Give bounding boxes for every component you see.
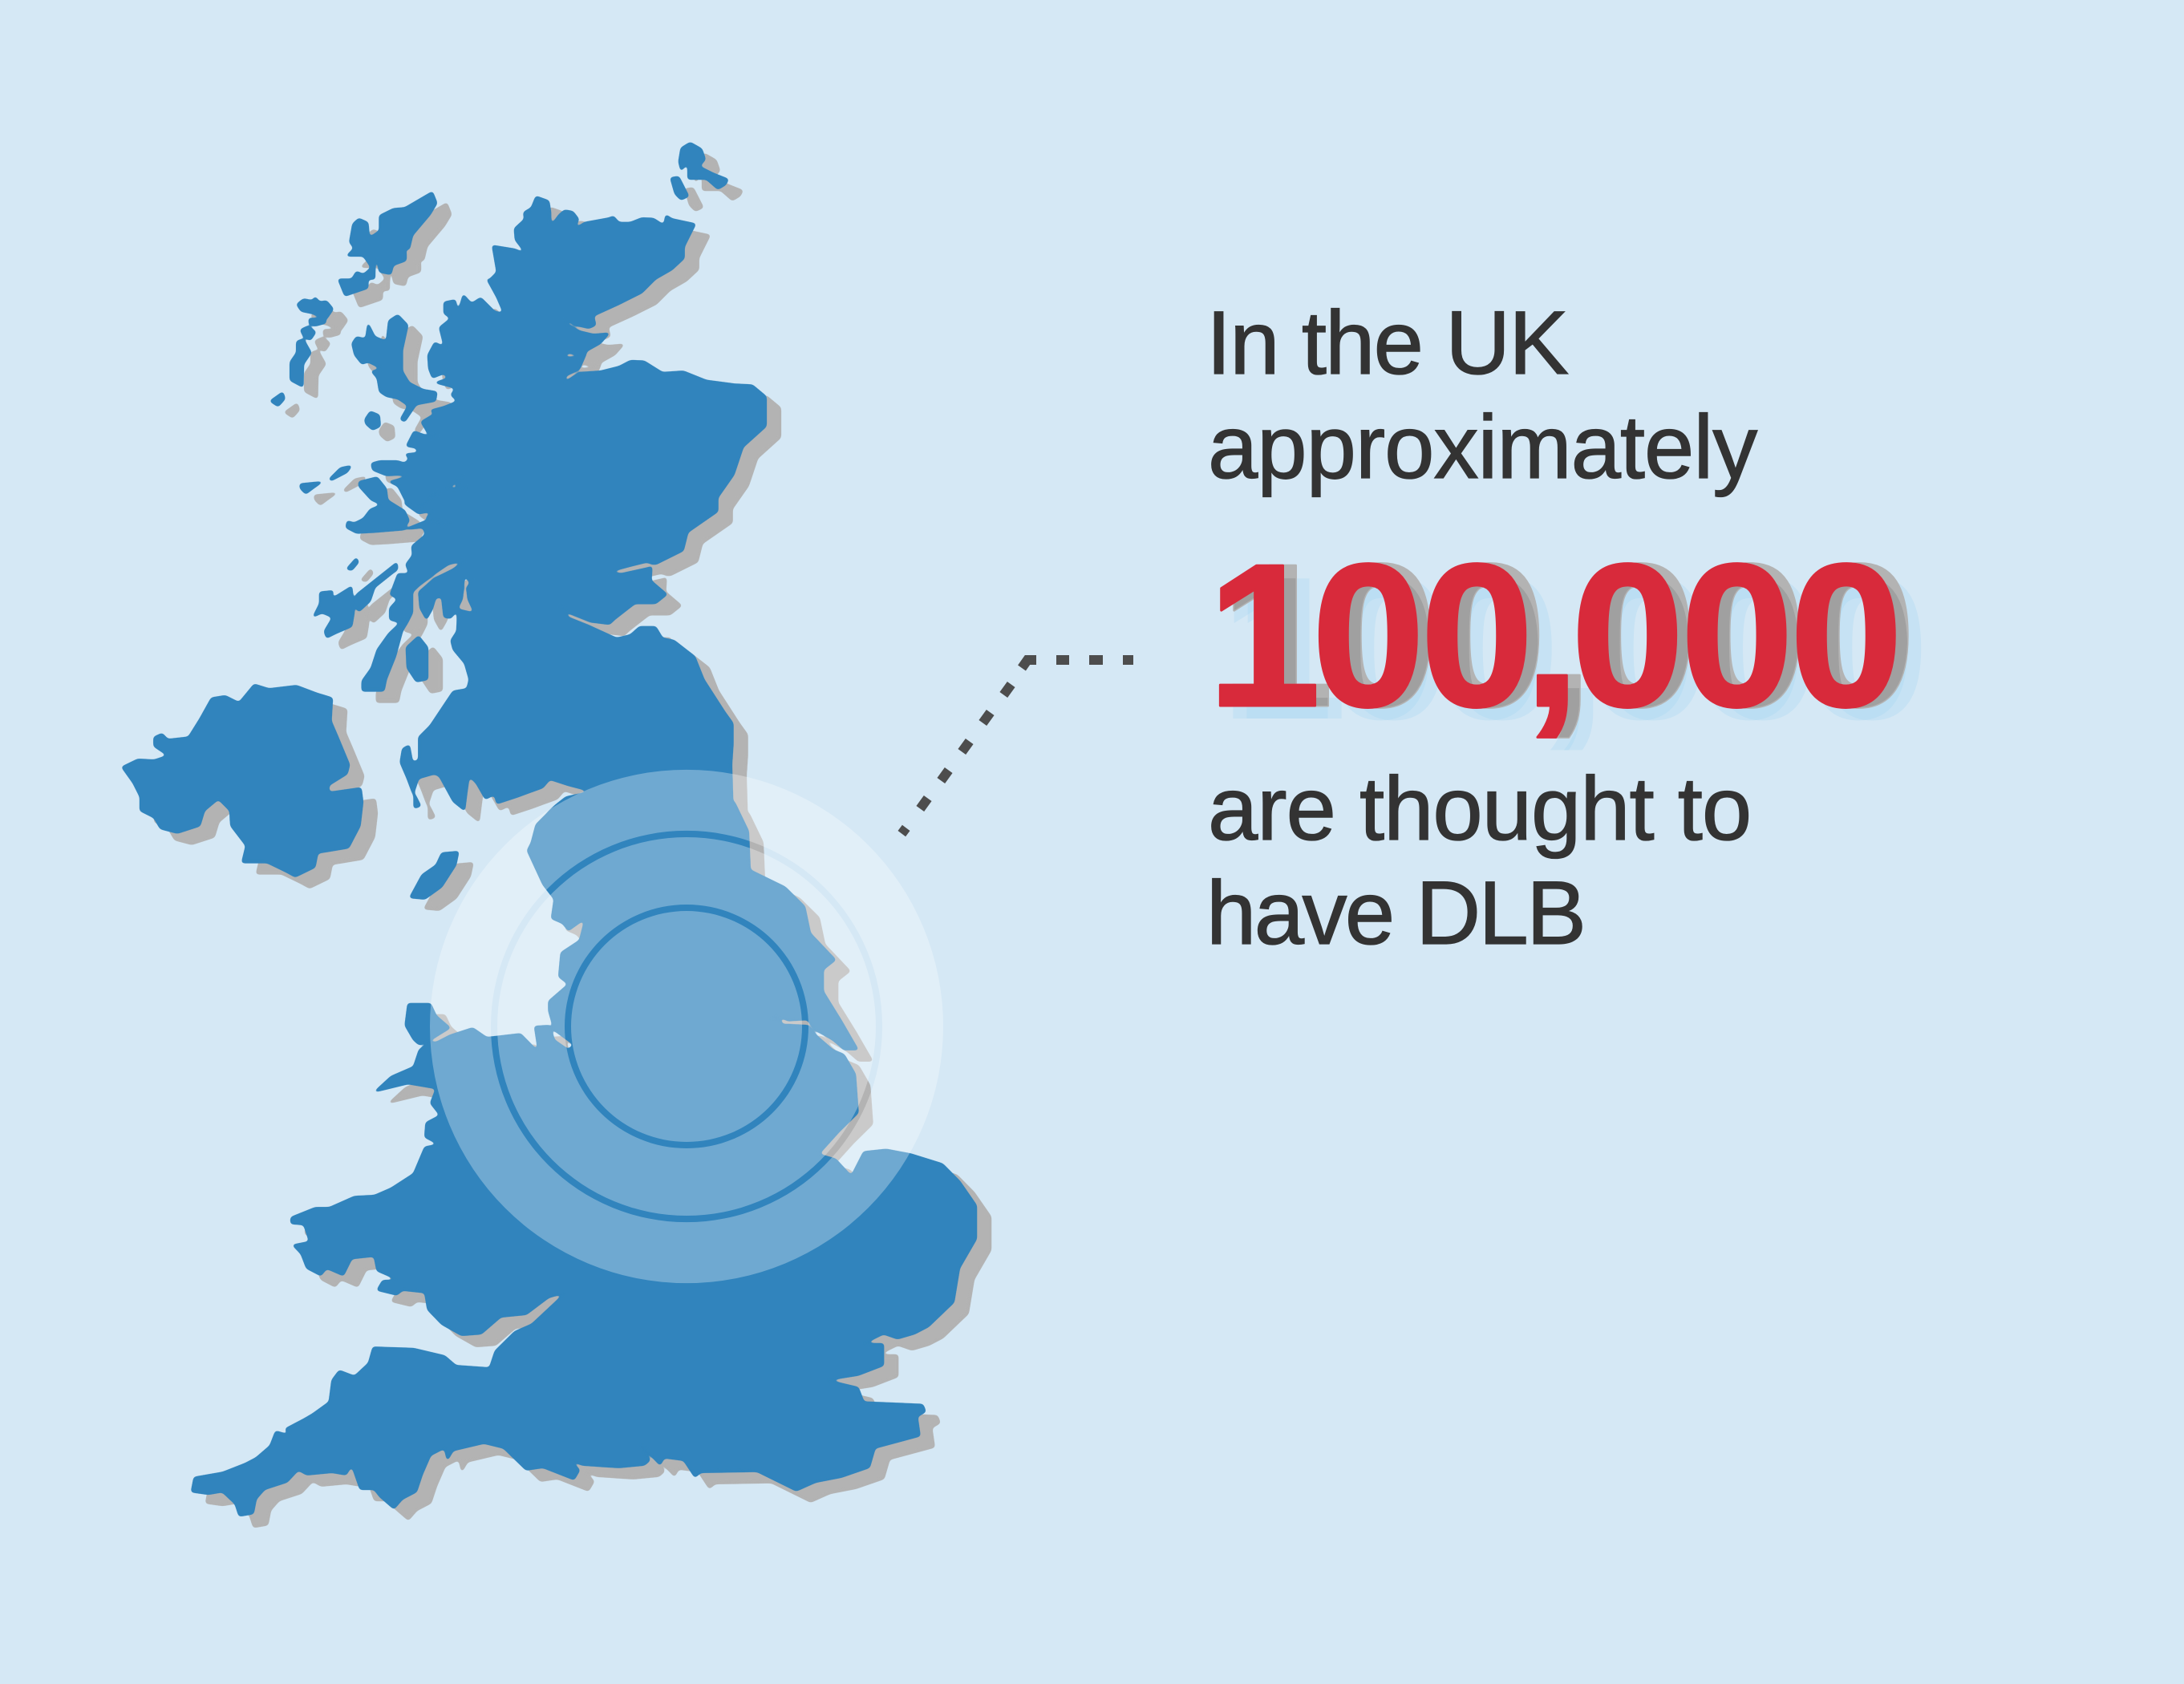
number grey shadow: 100,000 — [1220, 534, 1916, 762]
text: are thought to have DLB — [1206, 759, 1751, 963]
big number 100,000 with layered shadows — [1219, 562, 1921, 751]
text: In the UK approximately — [1206, 293, 1757, 497]
text: In the UK approximately: In the UK — [1206, 293, 1568, 393]
number light blue shadow: 100,000 — [1220, 534, 1916, 762]
number light blue shadow: 100,000 — [1234, 534, 1930, 762]
map shadow — [136, 154, 991, 1528]
concentric target circles over northern England — [430, 770, 943, 1283]
text: are thought to have DLB: have DLB — [1206, 863, 1586, 963]
text: are thought to have DLB: are thought to — [1208, 759, 1751, 859]
dotted leader line — [902, 660, 1133, 834]
number grey shadow: 100,000 — [1220, 521, 1916, 749]
map land — [122, 143, 976, 1516]
text: In the UK approximately: approximately — [1208, 397, 1757, 497]
map of the UK with drop shadow — [122, 143, 991, 1528]
number red: 100,000 — [1207, 521, 1903, 749]
